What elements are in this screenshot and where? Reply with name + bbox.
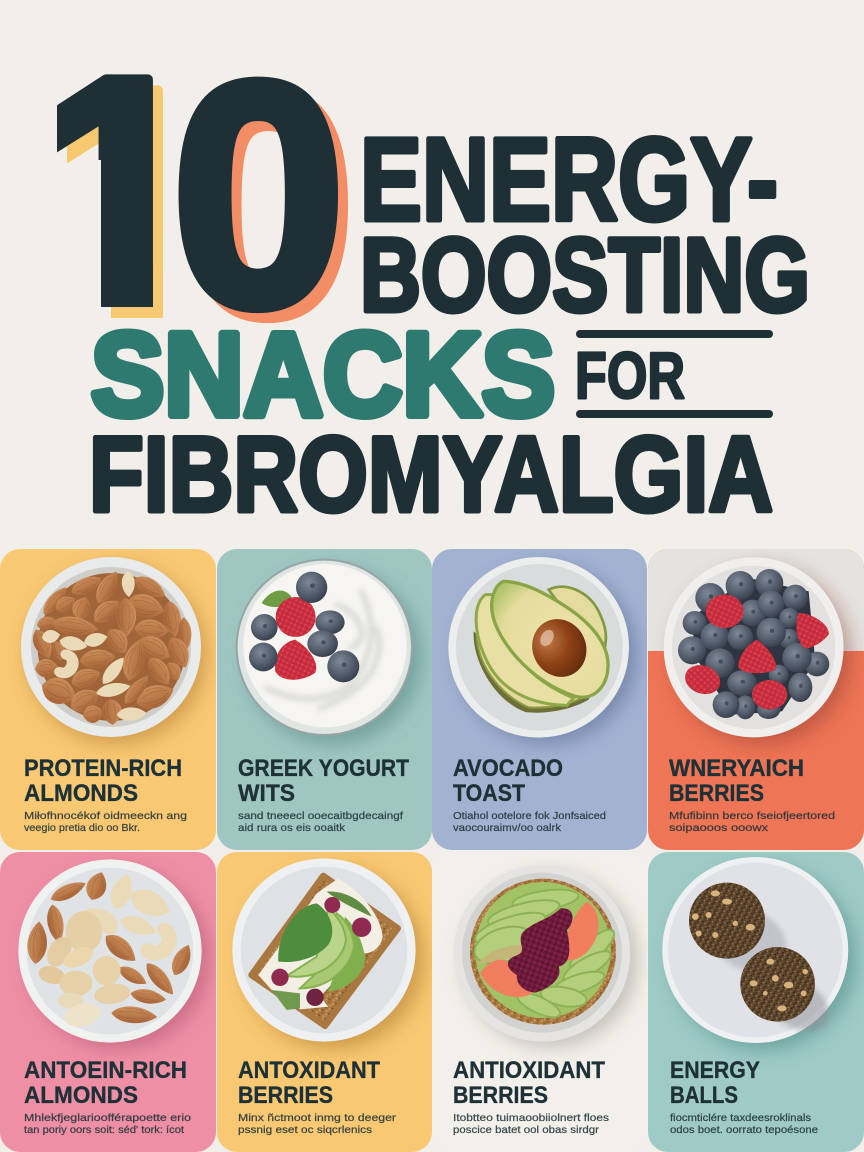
panel: energy-rich berries: [648, 549, 864, 850]
card text: poscice batet ool obas sirdgr: [453, 1124, 600, 1136]
icon: mixed berries on plate: [664, 557, 851, 745]
card text: [238, 1057, 397, 1136]
card text: WNERYAICH: [669, 755, 804, 782]
heading: energy-boosting: [360, 114, 810, 334]
numeral 10: 1: [38, 20, 218, 383]
icon: avocado fruit tart on plate: [454, 865, 638, 1047]
icon: seeded toast on plate: [232, 858, 424, 1049]
panel: antioxidant berries toast: [217, 852, 432, 1152]
icon: energy balls on plate: [662, 857, 856, 1050]
card text: Minx ñctmoot inmg to deeger: [238, 1112, 397, 1124]
card text: [24, 755, 187, 834]
card text: [453, 755, 606, 834]
heading: for with rules: [575, 330, 773, 418]
icon: avocado on plate: [448, 557, 636, 744]
card text: BERRIES: [238, 1082, 333, 1109]
heading: for with rules: FOR: [575, 338, 685, 412]
card text: [24, 1057, 191, 1136]
card text: ANTIOXIDANT: [453, 1057, 605, 1084]
card text: BERRIES: [453, 1082, 548, 1109]
icon: bowl of almonds: [21, 557, 206, 744]
numeral 10: 1: [28, 9, 208, 372]
card text: pssnig eset oc siqcrlenics: [238, 1124, 372, 1136]
card text: BALLS: [670, 1082, 738, 1109]
card text: ALMONDS: [24, 780, 138, 807]
card text: GREEK YOGURT: [238, 755, 409, 782]
numeral 10: [57, 74, 348, 324]
title: [57, 74, 807, 514]
panel: energy balls: [648, 852, 864, 1152]
card text: soipaooos ooowx: [669, 822, 769, 834]
card text: ANTOXIDANT: [238, 1057, 380, 1084]
panel: antioxidant berries tart: [453, 865, 645, 1136]
card text: [453, 1057, 609, 1136]
icon: yogurt bowl with berries: [237, 560, 422, 745]
card text: WITS: [238, 780, 295, 807]
card text: PROTEIN-RICH: [24, 755, 182, 782]
card text: aid rura os eis ooaitk: [238, 822, 346, 834]
card text: Mfufibinn berco fseiofjeertored: [669, 810, 835, 822]
panel: nut mix almonds: [0, 852, 216, 1152]
card text: AVOCADO: [453, 755, 563, 782]
card text: Otiahol ootelore fok Jonfsaiced: [453, 810, 606, 822]
icon: almonds and cashews on plate: [18, 859, 209, 1049]
card text: BERRIES: [669, 780, 764, 807]
card text: Miłofhnocékof oidmeeckn ang: [24, 810, 187, 822]
card text: [670, 1057, 818, 1136]
card text: tan poriy oors soit: séd' tork: ícot: [24, 1124, 184, 1136]
card text: veegio pretia dio oo Bkr.: [24, 822, 140, 834]
card text: Itobtteo tuimaoobiiolnert floes: [453, 1112, 609, 1124]
card text: ENERGY: [670, 1057, 760, 1084]
card text: sand tneeecl ooecaitbgdecaingf: [238, 810, 403, 822]
card text: fiocmticlére taxdeesroklinals: [670, 1112, 811, 1124]
panel: greek yogurt: [217, 549, 432, 850]
card text: [238, 755, 409, 834]
card text: ANTOEIN-RICH: [24, 1057, 187, 1084]
card text: [669, 755, 835, 834]
panel: avocado toast: [432, 549, 647, 850]
card text: vaocouraimv/oo oalrk: [453, 822, 562, 834]
heading: snacks: SNACKS: [91, 309, 555, 441]
card text: TOAST: [453, 780, 525, 807]
numeral 10: 0: [181, 25, 356, 383]
numeral 10: 0: [171, 15, 346, 373]
card text: odos boet. oorrato tepoésone: [670, 1124, 818, 1136]
panel: protein-rich almonds: [0, 549, 216, 850]
card text: Mhlekfjeglarioofférapoette erio: [24, 1112, 191, 1124]
card text: ALMONDS: [24, 1082, 138, 1109]
